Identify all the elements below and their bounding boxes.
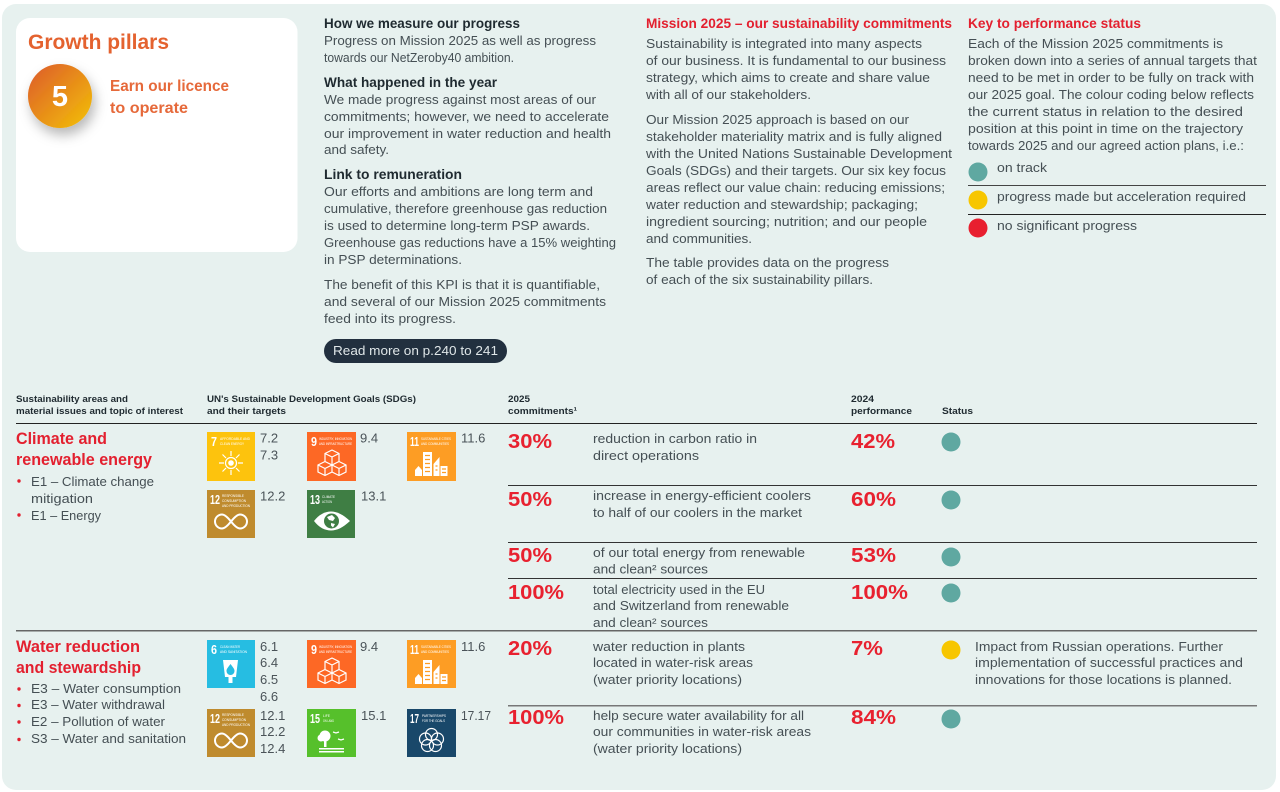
icon: SDG 12: RESPONSIBLE — [222, 713, 245, 717]
SDG 11 target: 11.6 — [461, 639, 485, 654]
table header: Status — [942, 406, 973, 417]
table header: material issues and topic of interest — [16, 406, 184, 417]
table header: 2024 — [851, 394, 875, 405]
text column: progress, year, remuneration: Link to remuneration — [324, 167, 462, 182]
text column: progress, year, remuneration: our improvement in water reduction and health — [324, 126, 611, 141]
commitment row: carbon ratio: direct operations — [593, 448, 699, 463]
text column: key to performance status: position at this point in time on the trajectory — [968, 121, 1243, 136]
icon: SDG 12 — [207, 709, 255, 757]
icon: SDG 7: CLEAN ENERGY — [220, 442, 245, 446]
text column: key to performance status: towards 2025 and our agreed action plans, i.e.: — [968, 138, 1244, 153]
icon: SDG 17: PARTNERSHIPS — [422, 714, 447, 718]
icon: SDG 15: ON LAND — [323, 719, 334, 723]
icon: SDG 13 — [307, 490, 355, 538]
status note: Impact from Russian operations. Further — [975, 639, 1224, 654]
text column: key to performance status: Each of the Mission 2025 commitments is — [968, 36, 1223, 51]
button: read more — [324, 339, 507, 363]
icon: SDG 6: 6 — [211, 642, 217, 657]
status note — [975, 639, 1243, 687]
text column: mission 2025: Goals (SDGs) and their targets. Our six key focus — [646, 163, 946, 178]
icon: SDG 13: CLIMATE — [322, 495, 336, 499]
icon: SDG 9: INDUSTRY, INNOVATION — [319, 437, 352, 441]
icon: SDG 9: 9 — [311, 642, 317, 657]
icon: SDG 13: 13 — [310, 492, 320, 507]
text column: mission 2025: The table provides data on the progress — [646, 255, 889, 270]
SDG 6 targets — [260, 639, 278, 704]
commitment row: carbon ratio — [508, 430, 960, 463]
section: water reduction and stewardship: and stewardship — [16, 659, 141, 677]
pillar name: Earn our licence — [110, 78, 229, 95]
icon: SDG 12: 12 — [210, 492, 220, 507]
icon: SDG 7 — [207, 432, 255, 481]
legend: performance status: no significant progress — [997, 218, 1137, 233]
SDG 7 targets: 7.2 — [260, 430, 278, 446]
commitment row: renewable energy — [508, 544, 960, 576]
icon: pillar number 5 — [28, 64, 92, 128]
table header: and their targets — [207, 406, 286, 417]
icon: SDG 9 — [307, 640, 356, 688]
SDG 9 target: 9.4 — [360, 639, 378, 654]
text column: key to performance status: our 2025 goal. The colour coding below reflects — [968, 87, 1254, 102]
button: read more: Read more on p.240 to 241 — [333, 343, 498, 358]
SDG 9 target: 9.4 — [360, 430, 378, 446]
commitment row: carbon ratio: 42% — [851, 430, 895, 453]
text column: key to performance status: Key to performance status — [968, 16, 1141, 31]
text column: mission 2025: and communities. — [646, 231, 752, 246]
pillar name — [110, 78, 229, 117]
icon: SDG 15 — [307, 709, 356, 757]
table header: 2025 — [508, 394, 531, 405]
SDG 12 targets: 12.4 — [260, 741, 285, 756]
commitment row: water availability: (water priority locations) — [593, 741, 742, 756]
topic list: E1 – Energy — [31, 508, 101, 523]
commitment row: electricity — [508, 581, 960, 630]
SDG 12 target: 12.2 — [260, 488, 285, 504]
SDG 17 target: 17.17 — [461, 708, 491, 723]
commitment row: coolers: increase in energy-efficient coolers — [593, 488, 811, 503]
icon: SDG 15: 15 — [310, 711, 320, 726]
commitment row: electricity: and Switzerland from renewable — [593, 598, 789, 613]
commitment row: water reduction in plants: water reduction in plants — [592, 639, 745, 654]
text column: mission 2025 — [645, 16, 952, 287]
text column: mission 2025: with all of our stakeholders. — [645, 87, 811, 102]
text column: key to performance status: broken down into a series of annual targets that — [968, 53, 1257, 68]
icon: SDG 7: 7 — [211, 434, 217, 449]
panel: growth pillars card — [16, 18, 298, 252]
commitment row: renewable energy: 50% — [508, 544, 552, 567]
icon: SDG 12 — [207, 490, 255, 538]
commitment row: water reduction in plants: located in water-risk areas — [593, 655, 753, 670]
table header: performance — [851, 406, 912, 417]
icon: pillar number 5: 5 — [52, 81, 68, 113]
icon: SDG 9: 9 — [311, 434, 317, 449]
icon: SDG 6: AND SANITATION — [220, 650, 247, 654]
icon: SDG 12: 12 — [210, 711, 220, 726]
icon: SDG 15: LIFE — [323, 714, 331, 718]
icon: SDG 13: ACTION — [322, 500, 332, 504]
commitment row: water availability — [508, 706, 960, 756]
icon: SDG 11: SUSTAINABLE CITIES — [421, 645, 451, 649]
text column: progress, year, remuneration: cumulative, therefore greenhouse gas reduction — [324, 201, 607, 216]
text column: progress, year, remuneration — [324, 16, 616, 326]
text column: mission 2025: stakeholder materiality matrix and is fully aligned — [646, 129, 942, 144]
text column: progress, year, remuneration: feed into its progress. — [324, 311, 456, 326]
commitment row: water availability: our communities in water-risk areas — [593, 724, 811, 739]
table header: commitments¹ — [508, 406, 577, 417]
commitment row: electricity: 100% — [851, 581, 908, 604]
icon: SDG 17 — [407, 709, 456, 757]
icon: SDG 9 — [307, 432, 356, 481]
table header: UN's Sustainable Development Goals (SDGs) — [207, 394, 416, 405]
commitment row: water reduction in plants: 7% — [851, 637, 883, 660]
icon: SDG 12: AND PRODUCTION — [222, 504, 250, 508]
icon: SDG 11: 11 — [410, 434, 419, 449]
commitment row: coolers: 50% — [508, 488, 552, 511]
SDG 11 target: 11.6 — [461, 430, 485, 446]
icon: SDG 9: AND INFRASTRUCTURE — [319, 650, 352, 654]
text column: mission 2025: Sustainability is integrated into many aspects — [646, 36, 922, 51]
topic list — [17, 474, 154, 523]
icon: SDG 17: 17 — [410, 711, 419, 726]
SDG 12 targets: 12.2 — [260, 724, 285, 739]
text column: progress, year, remuneration: The benefit of this KPI is that it is quantifiable, — [324, 277, 600, 292]
icon: SDG 12: CONSUMPTION — [222, 718, 246, 722]
section: climate and renewable energy — [16, 430, 154, 523]
SDG 7 targets — [260, 430, 278, 462]
table header — [16, 394, 973, 417]
SDG 13 target: 13.1 — [361, 488, 386, 504]
icon: SDG 12: AND PRODUCTION — [222, 723, 250, 727]
text column: progress, year, remuneration: and several of our Mission 2025 commitments — [324, 294, 606, 309]
text column: progress, year, remuneration: is used to determine long-term PSP awards. — [324, 218, 590, 233]
icon: SDG 7: AFFORDABLE AND — [220, 437, 250, 441]
heading: growth pillars: Growth pillars — [28, 31, 169, 54]
commitment row: carbon ratio: reduction in carbon ratio in — [593, 431, 757, 446]
text column: key to performance status: need to be met in order to be fully on track with — [968, 70, 1254, 85]
legend: performance status — [968, 160, 1266, 238]
icon: SDG 6: CLEAN WATER — [220, 645, 240, 649]
section: water reduction and stewardship — [16, 638, 186, 746]
text column: progress, year, remuneration: We made progress against most areas of our — [324, 92, 597, 107]
commitment row: water availability: 100% — [508, 706, 564, 729]
section: water reduction and stewardship: Water reduction — [16, 638, 140, 656]
icon: SDG 11: AND COMMUNITIES — [421, 442, 449, 446]
SDG 12 targets — [260, 708, 285, 756]
text column: progress, year, remuneration: and safety. — [324, 142, 389, 157]
icon: SDG 11: 11 — [410, 642, 419, 657]
legend: performance status: progress made but acceleration required — [997, 189, 1246, 204]
text column: mission 2025: areas reflect our value chain: reducing emissions; — [646, 180, 945, 195]
commitment row: electricity: 100% — [508, 581, 564, 604]
text column: mission 2025: with the United Nations Sustainable Development — [645, 146, 952, 161]
text column: mission 2025: of our business. It is fundamental to our business — [646, 53, 946, 68]
text column: mission 2025: Our Mission 2025 approach is based on our — [646, 112, 910, 127]
text column: key to performance status: the current status in relation to the desired — [968, 104, 1243, 119]
icon: SDG 12: CONSUMPTION — [222, 499, 246, 503]
icon: SDG 11 — [407, 432, 456, 481]
text column: progress, year, remuneration: Our efforts and ambitions are long term and — [324, 184, 593, 199]
SDG 7 targets: 7.3 — [260, 448, 278, 462]
topic list — [17, 681, 186, 746]
SDG 12 targets: 12.1 — [260, 708, 285, 723]
commitment row: renewable energy: of our total energy from renewable — [593, 545, 805, 560]
topic list: E1 – Climate change — [31, 474, 154, 489]
commitment row: water reduction in plants: (water priority locations) — [593, 672, 742, 687]
topic list: E3 – Water consumption — [31, 681, 181, 696]
table header: Sustainability areas and — [16, 394, 128, 405]
text column: key to performance status — [968, 16, 1257, 153]
commitment row: renewable energy: 53% — [851, 544, 896, 567]
text column: mission 2025: water reduction and stewardship; packaging; — [645, 197, 918, 212]
icon: SDG 6 — [207, 640, 255, 688]
topic list: E2 – Pollution of water — [31, 714, 166, 729]
section: climate and renewable energy: Climate and — [16, 430, 107, 448]
status note: implementation of successful practices and — [975, 655, 1243, 670]
commitment row: electricity: total electricity used in the EU — [593, 582, 765, 597]
icon: SDG 17: FOR THE GOALS — [422, 719, 445, 723]
text column: progress, year, remuneration: towards our NetZeroby40 ambition. — [324, 50, 514, 65]
topic list: S3 – Water and sanitation — [31, 731, 186, 746]
legend: performance status: on track — [997, 160, 1047, 175]
section: climate and renewable energy: renewable energy — [16, 451, 153, 469]
icon: SDG 11: AND COMMUNITIES — [421, 650, 449, 654]
text column: progress, year, remuneration: What happened in the year — [324, 75, 498, 90]
text column: progress, year, remuneration: How we measure our progress — [324, 16, 520, 31]
text column: mission 2025: of each of the six sustainability pillars. — [646, 272, 873, 287]
status note: innovations for those locations is planned. — [975, 672, 1232, 687]
icon: SDG 11: SUSTAINABLE CITIES — [421, 437, 451, 441]
commitment row: coolers: to half of our coolers in the market — [593, 505, 802, 520]
commitment row: carbon ratio: 30% — [508, 430, 552, 453]
icon: SDG 11 — [407, 640, 456, 688]
topic list: E3 – Water withdrawal — [31, 697, 165, 712]
text column: mission 2025: ingredient sourcing; nutrition; and our people — [646, 214, 927, 229]
text column: progress, year, remuneration: Progress on Mission 2025 as well as progress — [324, 33, 596, 48]
commitment row: water reduction in plants — [508, 637, 1243, 687]
commitment row: electricity: and clean² sources — [593, 615, 708, 630]
SDG 6 targets: 6.1 — [260, 639, 278, 654]
text column: progress, year, remuneration: in PSP determinations. — [324, 252, 462, 267]
pillar name: to operate — [110, 100, 188, 117]
SDG 6 targets: 6.4 — [260, 655, 278, 670]
text column: progress, year, remuneration: Greenhouse gas reductions have a 15% weighting — [324, 235, 616, 250]
commitment row: water availability: 84% — [851, 706, 896, 729]
commitment row: water availability: help secure water availability for all — [593, 708, 804, 723]
text column: progress, year, remuneration: commitments; however, we need to accelerate — [324, 109, 609, 124]
icon: SDG 12: RESPONSIBLE — [222, 494, 245, 498]
text column: mission 2025: strategy, which aims to create and share value — [646, 70, 930, 85]
commitment row: renewable energy: and clean² sources — [593, 562, 708, 576]
SDG 6 targets: 6.5 — [260, 672, 278, 687]
commitment row: coolers — [508, 488, 960, 520]
SDG 15 target: 15.1 — [361, 708, 386, 723]
SDG 6 targets: 6.6 — [260, 689, 278, 704]
commitment row: water reduction in plants: 20% — [508, 637, 552, 660]
icon: SDG 9: INDUSTRY, INNOVATION — [319, 645, 352, 649]
icon: SDG 9: AND INFRASTRUCTURE — [319, 442, 352, 446]
topic list: mitigation — [31, 491, 93, 506]
commitment row: coolers: 60% — [851, 488, 896, 511]
text column: mission 2025: Mission 2025 – our sustainability commitments — [646, 16, 952, 31]
